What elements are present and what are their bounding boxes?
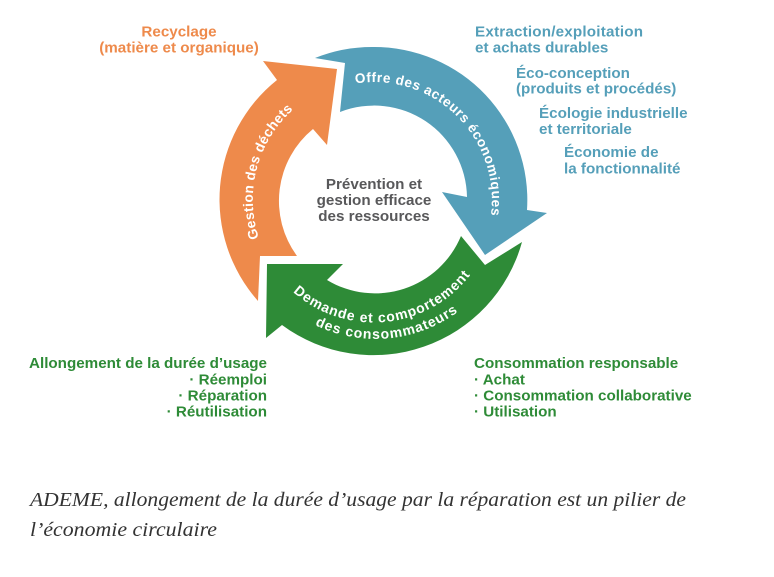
- text block: extraction/exploitation et achats durables: et achats durables: [475, 40, 608, 56]
- center text: prévention et gestion efficace des ressources: gestion efficace: [317, 192, 431, 209]
- label: offre des acteurs économiques: Offre des acteurs économiques: [355, 72, 500, 216]
- label: des consommateurs: des consommateurs: [316, 307, 456, 339]
- text block: éco-conception: Éco-conception: [516, 65, 630, 82]
- text block: écologie industrielle et territoriale: Écologie industrielle: [539, 105, 688, 122]
- caption: ADEME, allongement de la durée d’usage par la réparation est un pilier de: [28, 490, 686, 511]
- label: gestion des déchets: Gestion des déchets: [242, 106, 292, 240]
- text block: écologie industrielle et territoriale: [539, 105, 688, 138]
- text block: allongement de la durée d'usage: · Réemploi: [189, 372, 267, 388]
- text block: économie de la fonctionnalité: Économie de: [564, 144, 659, 161]
- text block: consommation responsable: · Utilisation: [474, 404, 557, 420]
- text block: écologie industrielle et territoriale: et territoriale: [539, 121, 632, 138]
- caption: l’économie circulaire: [30, 520, 217, 541]
- text block: extraction/exploitation et achats durables: Extraction/exploitation: [475, 24, 643, 40]
- text block: allongement de la durée d'usage: Allongement de la durée d’usage: [29, 355, 267, 372]
- text block: économie de la fonctionnalité: la fonctionnalité: [564, 160, 680, 178]
- text block: recyclage: Recyclage: [141, 24, 217, 40]
- arrow: demande et comportement des consommateurs (green): [266, 236, 522, 356]
- center text: prévention et gestion efficace des ressources: des ressources: [318, 208, 430, 225]
- text block: recyclage: (matière et organique): [99, 40, 259, 56]
- text block: économie de la fonctionnalité: [564, 144, 680, 178]
- arrow: gestion des déchets (orange): [220, 61, 337, 301]
- text block: allongement de la durée d'usage: [29, 355, 267, 420]
- center text: prévention et gestion efficace des ressources: [317, 176, 431, 225]
- text block: consommation responsable: [474, 355, 692, 420]
- text block: consommation responsable: Consommation responsable: [474, 355, 678, 372]
- label: demande et comportement: Demande et comportement: [294, 270, 470, 323]
- text block: consommation responsable: · Achat: [474, 372, 525, 388]
- text block: extraction/exploitation et achats durables: [475, 24, 643, 56]
- center text: prévention et gestion efficace des ressources: Prévention et: [326, 176, 422, 193]
- text block: allongement de la durée d'usage: · Réparation: [178, 388, 267, 404]
- text block: éco-conception: [516, 65, 676, 98]
- text block: allongement de la durée d'usage: · Réutilisation: [167, 404, 267, 420]
- arrow: offre des acteurs économiques (blue): [315, 47, 547, 255]
- text block: consommation responsable: · Consommation collaborative: [474, 388, 692, 404]
- caption: [28, 490, 686, 541]
- text block: recyclage: [99, 24, 259, 56]
- text block: éco-conception: (produits et procédés): [516, 80, 676, 98]
